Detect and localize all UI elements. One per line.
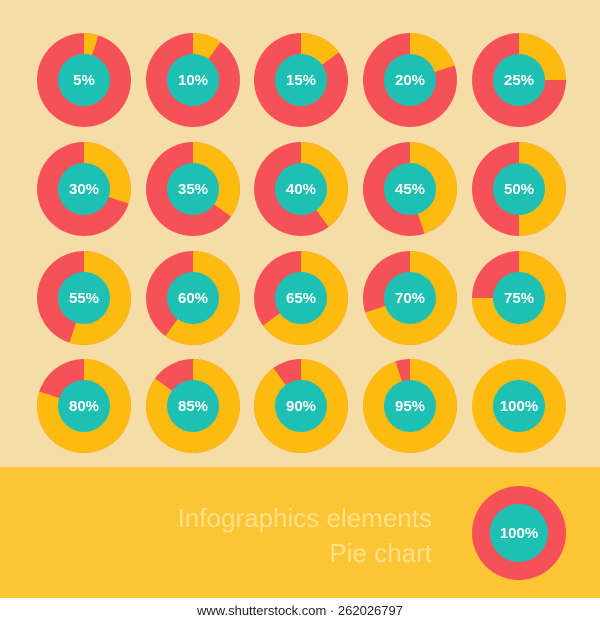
- pie 20%: 20%: [395, 72, 425, 89]
- pie 10%: [146, 33, 240, 127]
- pie 50%: 50%: [504, 181, 534, 198]
- pie 30%: 30%: [69, 181, 99, 198]
- bottom band: [0, 467, 600, 598]
- pie 60%: [146, 251, 240, 345]
- pie 55%: 55%: [69, 290, 99, 307]
- infographic: www.shutterstock.com · 262026797: [196, 603, 403, 618]
- pie 75%: 75%: [504, 290, 534, 307]
- pie 40%: 40%: [286, 181, 316, 198]
- pie 95%: [363, 359, 457, 453]
- big pie 100% red: [472, 486, 566, 580]
- pie 35%: [146, 142, 240, 236]
- pie 80%: [37, 359, 131, 453]
- pie 75%: [472, 251, 566, 345]
- pie 35%: 35%: [178, 181, 208, 198]
- pie 25%: 25%: [504, 72, 534, 89]
- pie 5%: [37, 33, 131, 127]
- pie 45%: [363, 142, 457, 236]
- pie 5%: 5%: [73, 72, 95, 89]
- pie 70%: 70%: [395, 290, 425, 307]
- title text: Infographics elements: [178, 503, 432, 533]
- pie 10%: 10%: [178, 72, 208, 89]
- pie 55%: [37, 251, 131, 345]
- pie 30%: [37, 142, 131, 236]
- pie 50%: [472, 142, 566, 236]
- pie 65%: [254, 251, 348, 345]
- pie 65%: 65%: [286, 290, 316, 307]
- title text: [178, 503, 433, 568]
- big pie 100% red: 100%: [500, 525, 538, 542]
- pie 40%: [254, 142, 348, 236]
- pie 100%: 100%: [500, 398, 538, 415]
- pie 90%: [254, 359, 348, 453]
- pie 100%: [472, 359, 566, 453]
- pie 85%: [146, 359, 240, 453]
- footer: [0, 598, 600, 620]
- pie 45%: 45%: [395, 181, 425, 198]
- pie 85%: 85%: [178, 398, 208, 415]
- pie 70%: [363, 251, 457, 345]
- pie 20%: [363, 33, 457, 127]
- pie 60%: 60%: [178, 290, 208, 307]
- pie 25%: [472, 33, 566, 127]
- pie 90%: 90%: [286, 398, 316, 415]
- title text: Pie chart: [329, 538, 433, 568]
- pie 80%: 80%: [69, 398, 99, 415]
- pie 95%: 95%: [395, 398, 425, 415]
- pie 15%: 15%: [286, 72, 316, 89]
- pie 15%: [254, 33, 348, 127]
